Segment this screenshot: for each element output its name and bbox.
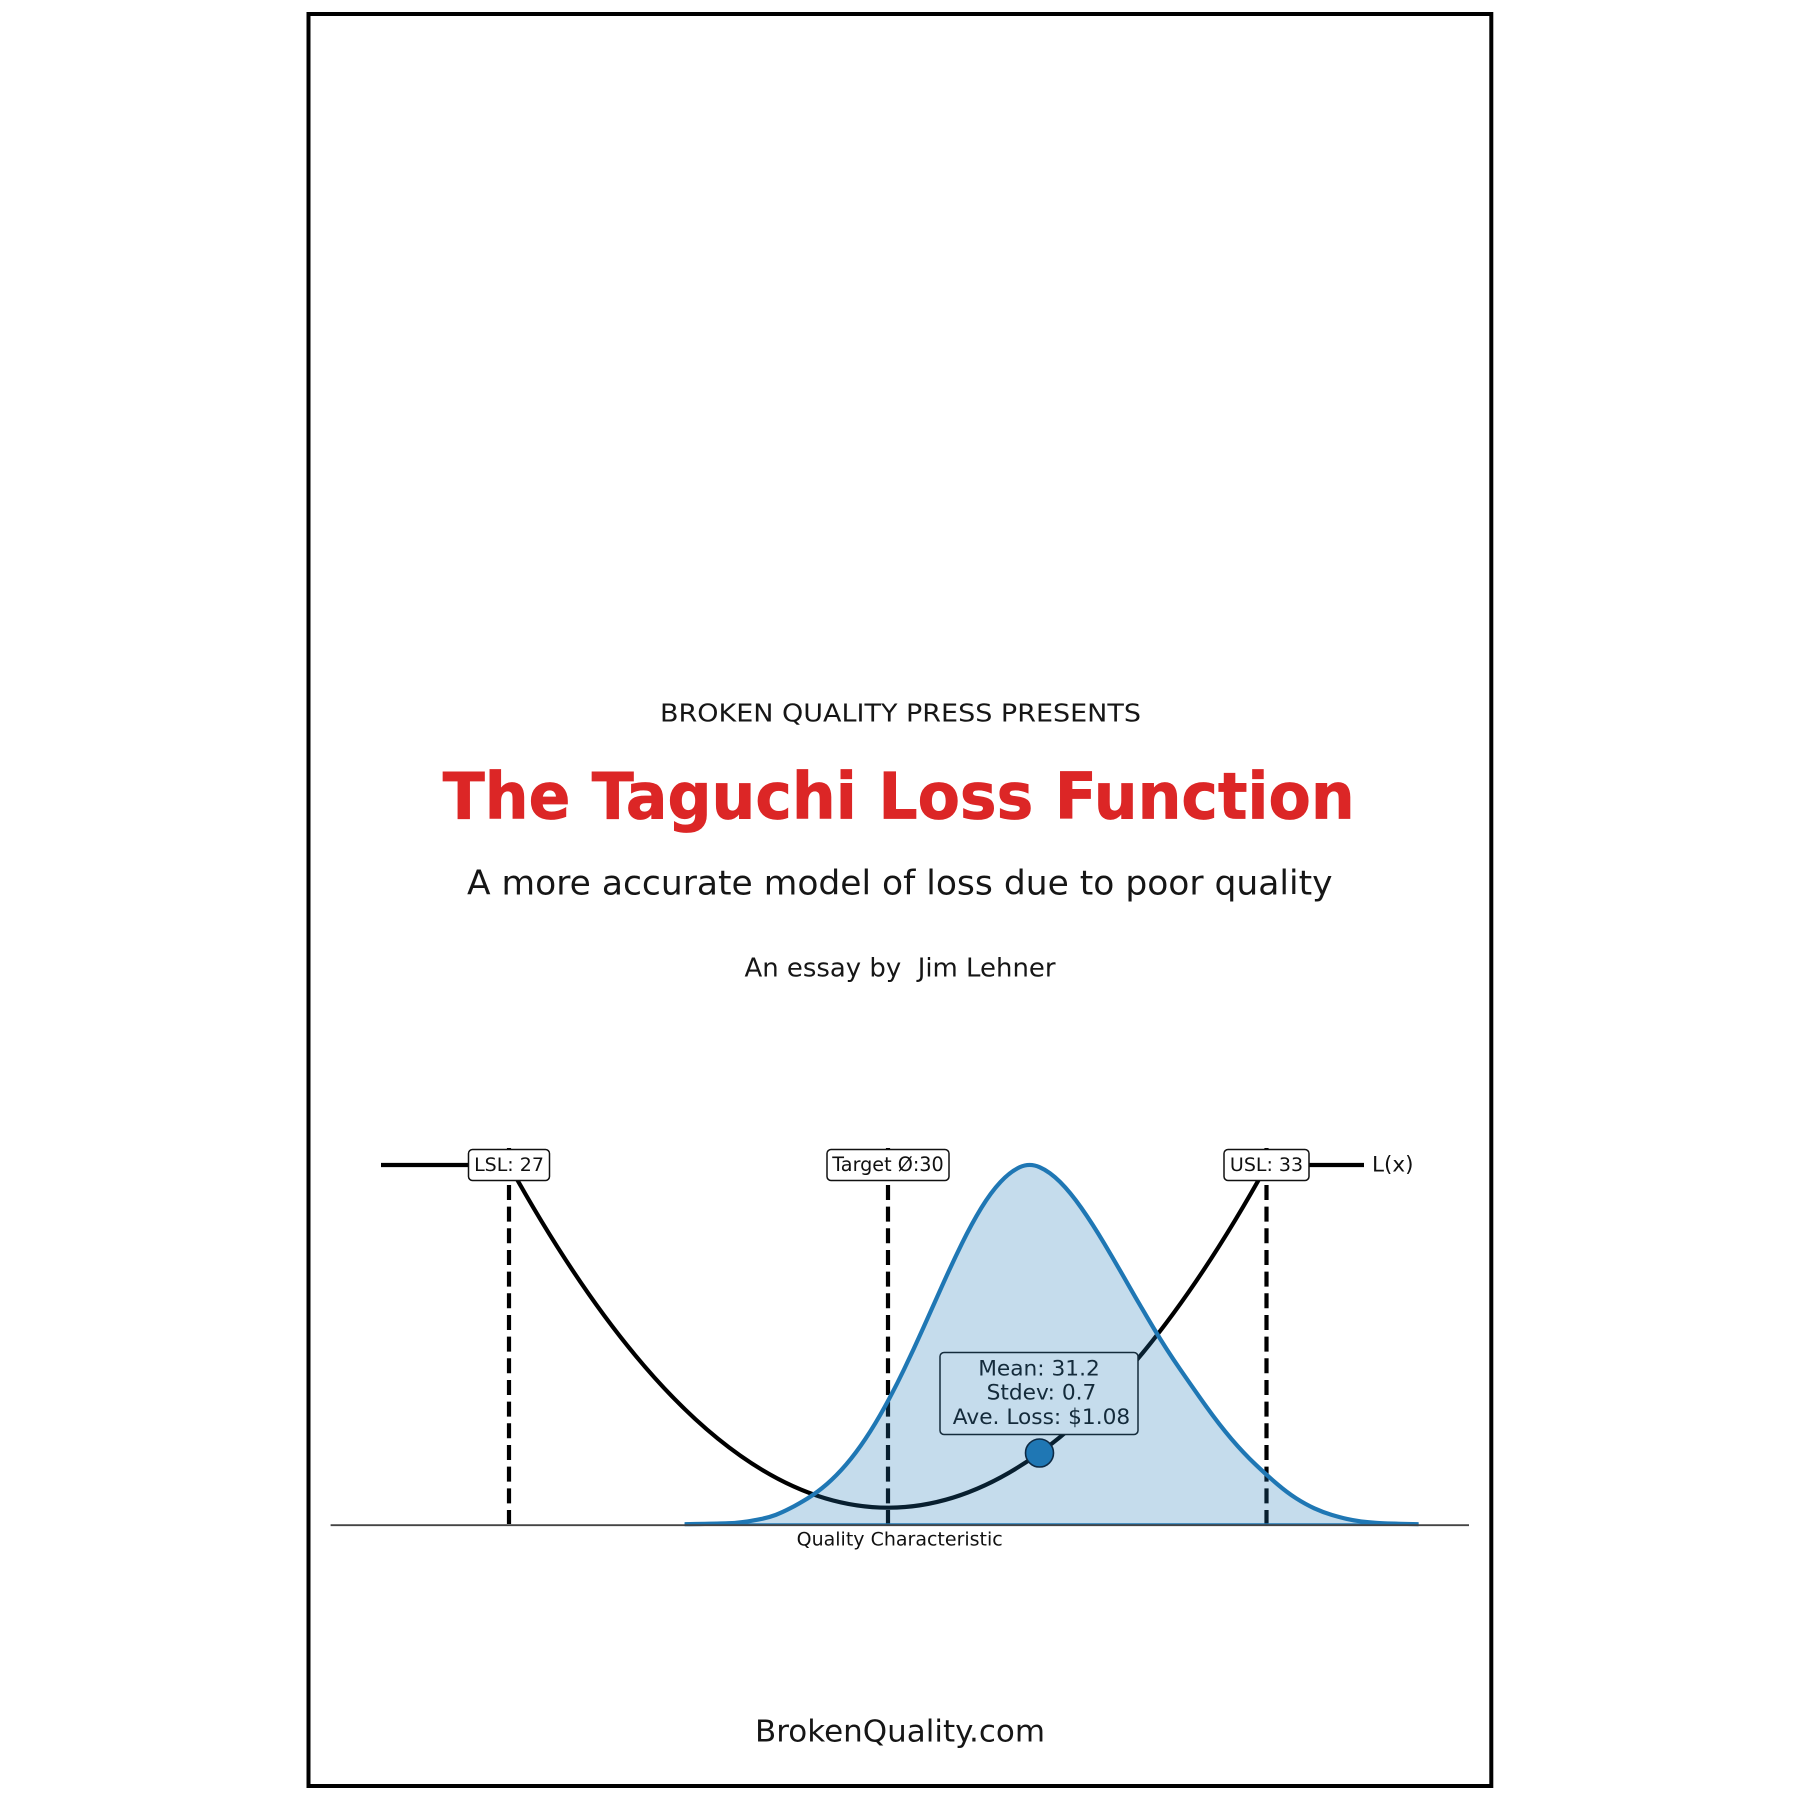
baseline axis [331, 1524, 1469, 1526]
label: L(x): L(x) [1372, 1152, 1413, 1178]
text: publisher line: BROKEN QUALITY PRESS PRESENTS [660, 698, 1141, 728]
callout: mean, stdev and average loss [940, 1352, 1138, 1434]
chart: Taguchi loss function with normal distribution [331, 1148, 1469, 1550]
subtitle: A more accurate model of loss due to poor quality [467, 863, 1332, 902]
title: The Taguchi Loss Function [443, 760, 1355, 834]
label: LSL [468, 1150, 550, 1180]
marker: process mean on loss curve [1026, 1439, 1054, 1467]
label: USL: USL: 33 [1230, 1154, 1303, 1176]
specification limit and target lines [509, 1148, 1266, 1524]
text: author line: An essay by Jim Lehner [744, 954, 1056, 984]
callout: mean, stdev and average loss: Mean: 31.2 [978, 1356, 1100, 1382]
text: website: BrokenQuality.com [755, 1715, 1045, 1750]
label: target [827, 1150, 949, 1180]
axis label: Quality Characteristic [797, 1528, 1003, 1550]
curve: quadratic loss L(x) [381, 1165, 1364, 1508]
label: USL [1224, 1150, 1309, 1180]
callout: mean, stdev and average loss: Ave. Loss: $1.08 [953, 1405, 1130, 1430]
panel: book cover frame [308, 14, 1491, 1786]
label: target: Target Ø:30 [831, 1153, 944, 1176]
curve outline and fill: normal distribution of output [685, 1165, 1419, 1524]
callout: mean, stdev and average loss: Stdev: 0.7 [987, 1380, 1096, 1406]
blue base edge of distribution [685, 1523, 1419, 1525]
label: LSL: LSL: 27 [474, 1154, 544, 1176]
